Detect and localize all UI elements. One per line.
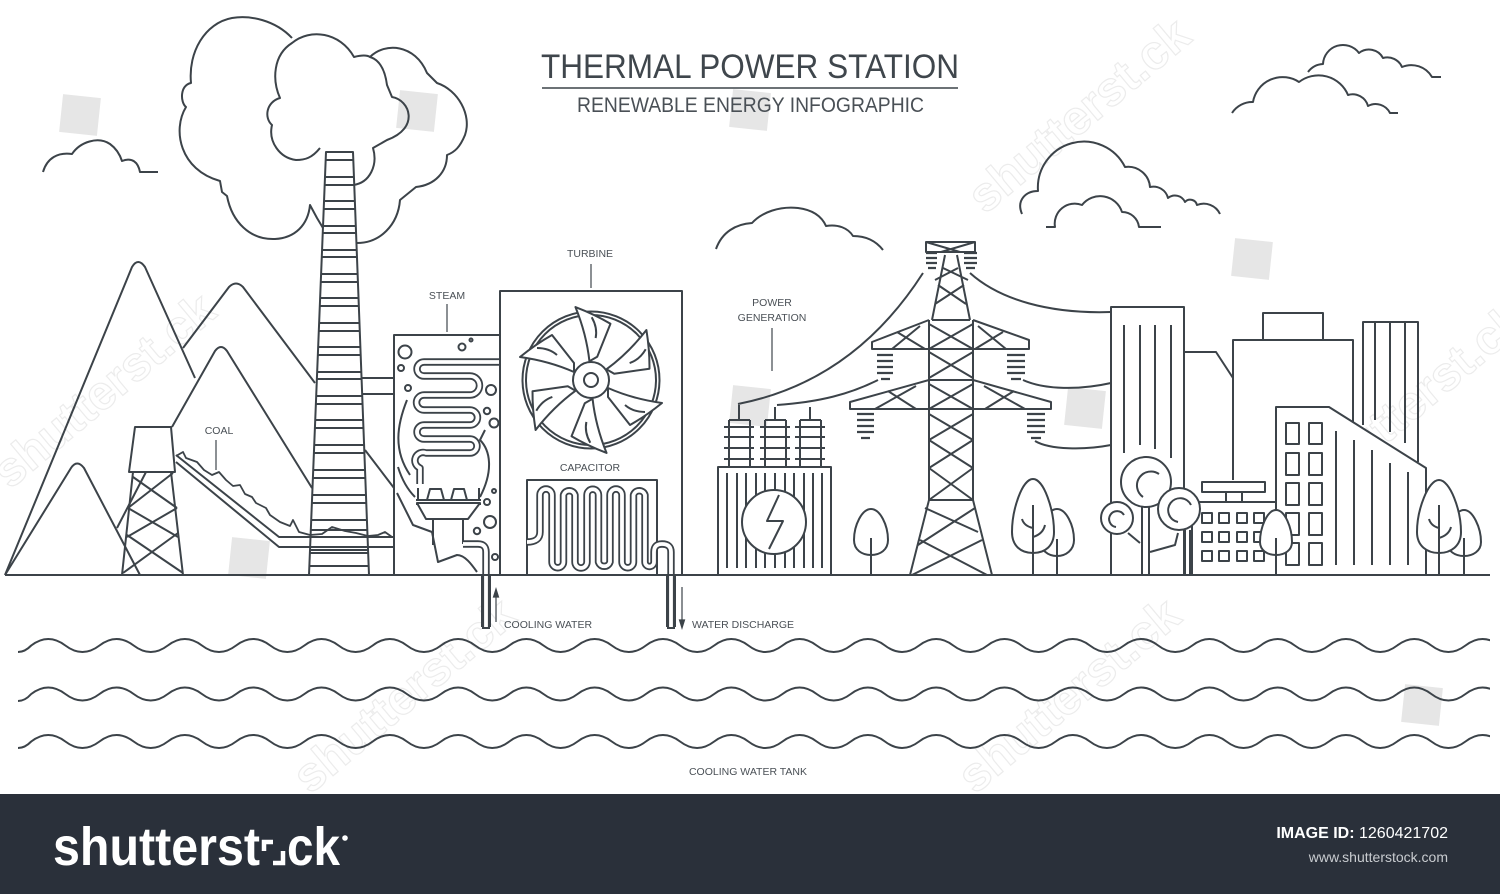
watermark: shutterst.ck: [283, 588, 526, 803]
label: power generation: POWER: [752, 297, 792, 309]
low building: [1192, 482, 1276, 575]
label: cooling water: COOLING WATER: [504, 619, 592, 631]
smoke: left puff: [180, 17, 323, 239]
label: coal: COAL: [205, 425, 233, 437]
label: steam: [429, 290, 465, 332]
power pylon: [850, 242, 1051, 575]
cooling water pipe: [463, 544, 486, 627]
chimney: [308, 151, 370, 574]
ground line: [5, 574, 1490, 576]
mountains: [5, 262, 315, 575]
back building: [1184, 352, 1233, 378]
label: turbine: TURBINE: [567, 248, 613, 260]
power trees: [854, 479, 1074, 575]
city trees: [1101, 457, 1481, 575]
watermark: shutterst.ck: [948, 588, 1191, 803]
water waves: [18, 639, 1500, 748]
coal conveyor: [176, 452, 393, 547]
turbine fan: [517, 296, 665, 464]
label: water discharge: WATER DISCHARGE: [692, 619, 794, 631]
website: www.shutterstock.com: [1308, 849, 1448, 865]
label: capacitor: CAPACITOR: [560, 462, 621, 474]
city buildings: [1111, 307, 1426, 575]
label: coal: [205, 425, 233, 470]
skyscraper left: [1111, 307, 1184, 575]
smoke cloud: [180, 17, 467, 243]
icon: lightning bolt: [767, 495, 783, 549]
coal tower: [122, 427, 183, 575]
arrow: water discharge down: [680, 587, 684, 628]
centre tower: [1233, 313, 1353, 480]
footer bar: [0, 794, 1500, 894]
office block: [1276, 407, 1426, 575]
transformer: [718, 405, 831, 575]
burner: [416, 488, 481, 545]
smoke: right puff: [357, 48, 467, 243]
smoke: front puff: [267, 34, 409, 185]
cloud: top left: [43, 140, 158, 172]
label: power generation: [738, 297, 806, 371]
boiler coil: [415, 362, 500, 484]
title: THERMAL POWER STATION: [541, 48, 959, 86]
footer logo: shutterst: [53, 817, 260, 877]
flame: [397, 400, 489, 572]
turbine housing: [500, 291, 682, 575]
title: RENEWABLE ENERGY INFOGRAPHIC: [577, 94, 924, 117]
bushings: [724, 405, 825, 467]
image id: IMAGE ID: 1260421702: [1276, 825, 1448, 842]
watermark: shutterst.ck: [958, 8, 1201, 223]
transmission wires: [738, 273, 1111, 448]
boiler: [394, 335, 500, 575]
capacitor condenser: [527, 480, 671, 627]
title: [541, 48, 959, 117]
footer logo: ck: [287, 817, 341, 877]
pipes chimney to boiler: [362, 378, 394, 488]
boiler bubbles: [398, 338, 498, 560]
label: cooling water tank: COOLING WATER TANK: [689, 766, 807, 778]
insulators: [857, 253, 1045, 438]
arrow: cooling water up: [494, 589, 498, 622]
label: turbine: [567, 248, 613, 288]
clouds: top right: [1232, 45, 1441, 113]
cloud: centre: [716, 208, 883, 250]
water pipes inside ground: [482, 575, 675, 628]
right tower: [1363, 322, 1418, 462]
label: steam: STEAM: [429, 290, 465, 302]
clouds: centre right: [1020, 142, 1220, 227]
label: power generation: GENERATION: [738, 312, 806, 324]
